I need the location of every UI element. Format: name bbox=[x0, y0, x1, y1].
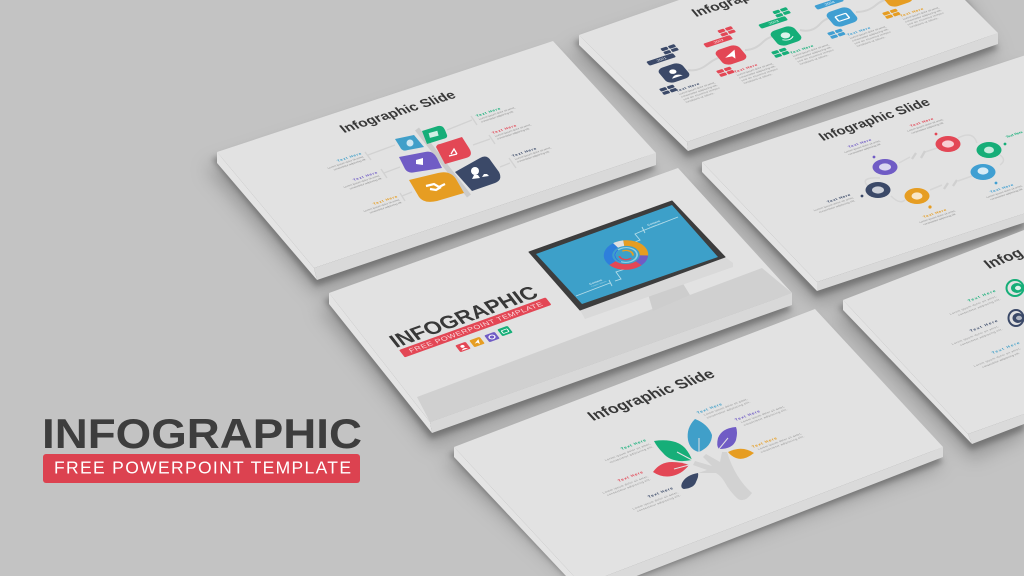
label: red: Lorem ipsum dolor sit amet, bbox=[602, 475, 649, 494]
label: orange: Lorem ipsum dolor sit amet, bbox=[757, 432, 803, 451]
icon: red tile bbox=[455, 342, 471, 352]
screen connectors bbox=[576, 217, 678, 296]
label: green: Text Here bbox=[475, 106, 502, 118]
label: cyan: consectetur adipiscing elit. bbox=[981, 351, 1021, 369]
heading: Infographic Slide bbox=[584, 366, 719, 424]
milestone: green: 2023 bbox=[767, 19, 780, 25]
icon: orange tile bbox=[469, 337, 485, 347]
monitor bezel bbox=[529, 201, 725, 310]
soft slide shadows bbox=[206, 0, 1024, 576]
leaf: green bbox=[654, 440, 692, 461]
node: cyan bbox=[970, 164, 997, 184]
label: orange: consectetur adipiscing elit. bbox=[369, 201, 403, 214]
label: navy: consectetur adipiscing elit. bbox=[818, 199, 856, 214]
label: blue: Text Here bbox=[846, 26, 872, 37]
subtitle banner bbox=[43, 454, 360, 483]
slide: ring list infographic bbox=[843, 230, 1024, 444]
milestone: green bbox=[745, 7, 818, 58]
label: navy bbox=[511, 142, 555, 163]
monitor bbox=[529, 201, 733, 319]
label: cyan: Text Here bbox=[336, 151, 363, 163]
label: orange: consectetur adipiscing elit. bbox=[760, 435, 805, 454]
label: navy bbox=[810, 192, 857, 215]
slide: cover with monitor bbox=[329, 168, 792, 433]
label: red: consectetur adipiscing elit. bbox=[496, 127, 531, 140]
label: navy: Lorem ipsum dolor sit amet, bbox=[678, 81, 716, 96]
label: navy: Lorem ipsum dolor sit amet, bbox=[514, 146, 552, 161]
label: cyan: Lorem ipsum dolor sit amet, bbox=[973, 347, 1022, 368]
label: red: consectetur adipiscing elit, bbox=[738, 65, 777, 79]
label: purple: Text Here bbox=[847, 138, 873, 149]
label: navy: Text Here bbox=[675, 82, 701, 93]
label: green bbox=[475, 102, 519, 123]
label: blue: consectetur adipiscing elit, bbox=[851, 28, 890, 42]
milestone: navy: 2021 bbox=[655, 56, 668, 62]
label: orange bbox=[359, 194, 404, 215]
label: navy bbox=[675, 77, 723, 104]
central divider bbox=[417, 129, 469, 196]
label: purple: Text Here bbox=[733, 409, 762, 422]
label: blue: sed do eiusmod tempor bbox=[853, 30, 892, 45]
label: orange bbox=[899, 2, 947, 29]
label: green: consectetur adipiscing elit, bbox=[794, 46, 833, 60]
screen caption: lower bbox=[588, 278, 607, 288]
milestone: red: 2022 bbox=[712, 38, 725, 44]
main title: INFOGRAPHIC bbox=[42, 410, 362, 457]
slide body bbox=[579, 0, 998, 151]
node: red bbox=[935, 133, 960, 152]
label: navy bbox=[946, 319, 1006, 349]
label: purple bbox=[339, 170, 384, 191]
label: cyan: Text Here bbox=[989, 183, 1015, 194]
leaf: cyan bbox=[688, 419, 712, 452]
label: navy bbox=[627, 486, 682, 513]
screen caption: upper bbox=[646, 219, 665, 229]
slide content bbox=[323, 89, 555, 215]
label: navy: consectetur adipiscing elit, bbox=[680, 84, 719, 98]
screen caption: upper: Lorem ipsum bbox=[649, 221, 665, 229]
label: cyan: Lorem ipsum dolor sit amet, bbox=[985, 184, 1024, 199]
label: red: Text Here bbox=[909, 117, 935, 128]
label: green bbox=[600, 438, 654, 465]
label: cyan bbox=[323, 151, 368, 172]
slide content bbox=[810, 96, 1024, 227]
label: cyan: Text Here bbox=[991, 341, 1021, 355]
hand trunk bbox=[693, 452, 752, 500]
label: red: incididunt ut labore. bbox=[743, 73, 774, 85]
label: navy: incididunt ut labore. bbox=[685, 92, 716, 104]
label: orange: Lorem ipsum dolor sit amet, bbox=[362, 198, 401, 213]
node: green bbox=[976, 142, 1006, 158]
label: cyan bbox=[695, 394, 751, 421]
milestone: blue: 2024 bbox=[823, 0, 836, 6]
label: red bbox=[491, 119, 535, 140]
label: navy: Text Here bbox=[511, 146, 538, 158]
connector paths bbox=[865, 135, 1004, 202]
slide: timeline infographic bbox=[579, 0, 998, 151]
ring icon: navy bbox=[1008, 310, 1024, 326]
tile: cyan bbox=[395, 135, 424, 151]
slide content bbox=[944, 246, 1024, 371]
monitor stand bbox=[648, 282, 690, 311]
label: navy: Text Here bbox=[646, 486, 675, 499]
label: orange: Lorem ipsum dolor sit amet, bbox=[902, 6, 940, 21]
tile: red bbox=[436, 137, 471, 164]
subtitle banner: FREE POWERPOINT TEMPLATE bbox=[54, 458, 351, 478]
milestone: red bbox=[690, 26, 763, 77]
label: red: Lorem ipsum dolor sit amet, bbox=[736, 62, 774, 77]
leaf: navy bbox=[681, 473, 698, 489]
label: green: Text Here bbox=[967, 289, 997, 303]
label: green: Lorem ipsum dolor sit amet, bbox=[478, 106, 516, 121]
label: orange: consectetur adipiscing elit, bbox=[904, 9, 943, 23]
milestone: blue bbox=[801, 0, 874, 39]
label: blue bbox=[846, 21, 894, 48]
label: navy: sed do eiusmod tempor bbox=[682, 86, 721, 101]
screen caption: upper: Content bbox=[646, 220, 661, 227]
label: red bbox=[903, 114, 947, 135]
label: red: Lorem ipsum dolor sit amet, bbox=[494, 123, 532, 138]
label: green bbox=[789, 39, 837, 66]
tile: purple bbox=[399, 152, 442, 173]
slide body bbox=[454, 309, 943, 576]
label: green: consectetur adipiscing elit. bbox=[608, 445, 654, 464]
label: green: sed do eiusmod tempor bbox=[796, 48, 835, 63]
label: cyan bbox=[982, 181, 1024, 202]
label: red: Text Here bbox=[616, 470, 645, 483]
label: navy: Lorem ipsum dolor sit amet, bbox=[951, 325, 1000, 346]
label: navy: Lorem ipsum dolor sit amet, bbox=[632, 491, 679, 510]
label: green: Lorem ipsum dolor sit amet, bbox=[949, 295, 998, 316]
leaf: purple bbox=[717, 427, 737, 449]
label: green: Lorem ipsum dolor sit amet, bbox=[792, 43, 830, 58]
leader lines bbox=[365, 116, 516, 201]
label: cyan: Text Here bbox=[695, 402, 724, 415]
label: blue: incididunt ut labore. bbox=[856, 36, 887, 48]
label: navy: Text Here bbox=[969, 319, 999, 333]
tile: orange bbox=[409, 172, 464, 202]
label: purple: Lorem ipsum dolor sit amet, bbox=[843, 139, 882, 154]
tile: navy bbox=[455, 157, 500, 191]
label: orange bbox=[915, 206, 959, 227]
label: orange: Text Here bbox=[922, 208, 948, 219]
label: red bbox=[597, 470, 652, 497]
slide: circle path infographic bbox=[702, 56, 1024, 291]
label: red: sed do eiusmod tempor bbox=[740, 67, 779, 82]
label: cyan: consectetur adipiscing elit. bbox=[333, 158, 367, 171]
label: purple bbox=[733, 401, 788, 428]
label: red: consectetur adipiscing elit. bbox=[910, 121, 945, 135]
label: red: Text Here bbox=[733, 63, 759, 74]
slide content bbox=[385, 201, 733, 357]
milestone: orange bbox=[868, 0, 921, 19]
slide body bbox=[329, 168, 792, 433]
cover title: INFOGRAPHIC bbox=[385, 282, 543, 351]
label: navy: consectetur adipiscing elit. bbox=[516, 150, 551, 163]
heading: Infographic Slide bbox=[816, 96, 934, 144]
screen caption: lower: Lorem ipsum bbox=[591, 280, 607, 288]
slide body bbox=[843, 230, 1024, 444]
label: green: consectetur adipiscing elit. bbox=[957, 298, 1001, 317]
slide content bbox=[584, 366, 805, 513]
slide content bbox=[633, 0, 947, 104]
label: orange: Text Here bbox=[899, 7, 925, 18]
leaf: red bbox=[653, 462, 689, 476]
label: purple bbox=[840, 136, 884, 157]
label: green: Text Here bbox=[619, 438, 648, 451]
label: orange: Text Here bbox=[750, 436, 779, 449]
slide body bbox=[217, 41, 656, 280]
heading: Infographic Slide bbox=[337, 89, 459, 136]
label: navy: consectetur adipiscing elit. bbox=[636, 494, 682, 513]
label: purple: Lorem ipsum dolor sit amet, bbox=[740, 405, 786, 424]
label: purple: Lorem ipsum dolor sit amet, bbox=[342, 174, 381, 189]
label: purple: Text Here bbox=[352, 170, 379, 182]
bottom band bbox=[417, 268, 792, 422]
label: green: Lorem ipsum dolor sit amet, bbox=[604, 442, 652, 462]
donut chart bbox=[602, 239, 650, 271]
label: orange: Text Here bbox=[372, 194, 399, 206]
label: green: Text Here bbox=[789, 44, 815, 55]
label: cyan: consectetur adipiscing elit. bbox=[705, 400, 751, 419]
label: orange: sed do eiusmod tempor bbox=[906, 11, 945, 26]
ring icon: green bbox=[1006, 280, 1024, 296]
slide: quad tile infographic bbox=[217, 41, 656, 280]
label: red: Text Here bbox=[491, 123, 518, 135]
label: cyan: Lorem ipsum dolor sit amet, bbox=[703, 398, 749, 416]
label: blue: Lorem ipsum dolor sit amet, bbox=[849, 25, 887, 40]
break ticks bbox=[912, 151, 957, 189]
label: orange bbox=[750, 428, 805, 455]
label: purple: consectetur adipiscing elit. bbox=[743, 408, 788, 427]
tile: green bbox=[422, 126, 447, 144]
cover ribbon: FREE POWERPOINT TEMPLATE bbox=[407, 301, 544, 354]
label: red bbox=[733, 58, 781, 85]
label: navy: consectetur adipiscing elit. bbox=[959, 328, 1003, 347]
slide body bbox=[702, 56, 1024, 291]
label: green: incididunt ut labore. bbox=[799, 54, 830, 66]
label: red: consectetur adipiscing elit. bbox=[606, 478, 652, 497]
label: green: consectetur adipiscing elit. bbox=[480, 110, 515, 123]
screen caption: lower: Content bbox=[588, 279, 603, 286]
label: red: Lorem ipsum dolor sit amet, bbox=[906, 118, 945, 133]
leaf: orange bbox=[728, 449, 754, 459]
label: purple: consectetur adipiscing elit. bbox=[847, 142, 882, 156]
icon: purple tile bbox=[484, 332, 500, 342]
label: cyan: consectetur adipiscing elit. bbox=[989, 187, 1024, 201]
timeline connector bbox=[688, 0, 897, 70]
label: orange: Lorem ipsum dolor sit amet, bbox=[918, 209, 957, 224]
milestone: navy bbox=[633, 44, 706, 95]
label: purple: consectetur adipiscing elit. bbox=[349, 177, 383, 190]
tight slide shadows bbox=[212, 0, 1024, 576]
node: orange bbox=[904, 188, 932, 209]
icon: green tile bbox=[497, 326, 513, 336]
monitor chin bbox=[580, 257, 733, 319]
label: cyan: Lorem ipsum dolor sit amet, bbox=[326, 155, 365, 170]
node: purple bbox=[872, 156, 898, 175]
label: navy: Text Here bbox=[826, 193, 852, 204]
monitor screen bbox=[536, 205, 718, 304]
node: navy bbox=[861, 182, 890, 198]
slide: hand tree infographic bbox=[454, 309, 943, 576]
label: orange: consectetur adipiscing elit. bbox=[922, 212, 957, 226]
label: orange: incididunt ut labore. bbox=[909, 17, 940, 29]
label: green bbox=[944, 289, 1004, 319]
label: cyan bbox=[968, 341, 1024, 371]
label: navy: Lorem ipsum dolor sit amet, bbox=[813, 196, 855, 212]
